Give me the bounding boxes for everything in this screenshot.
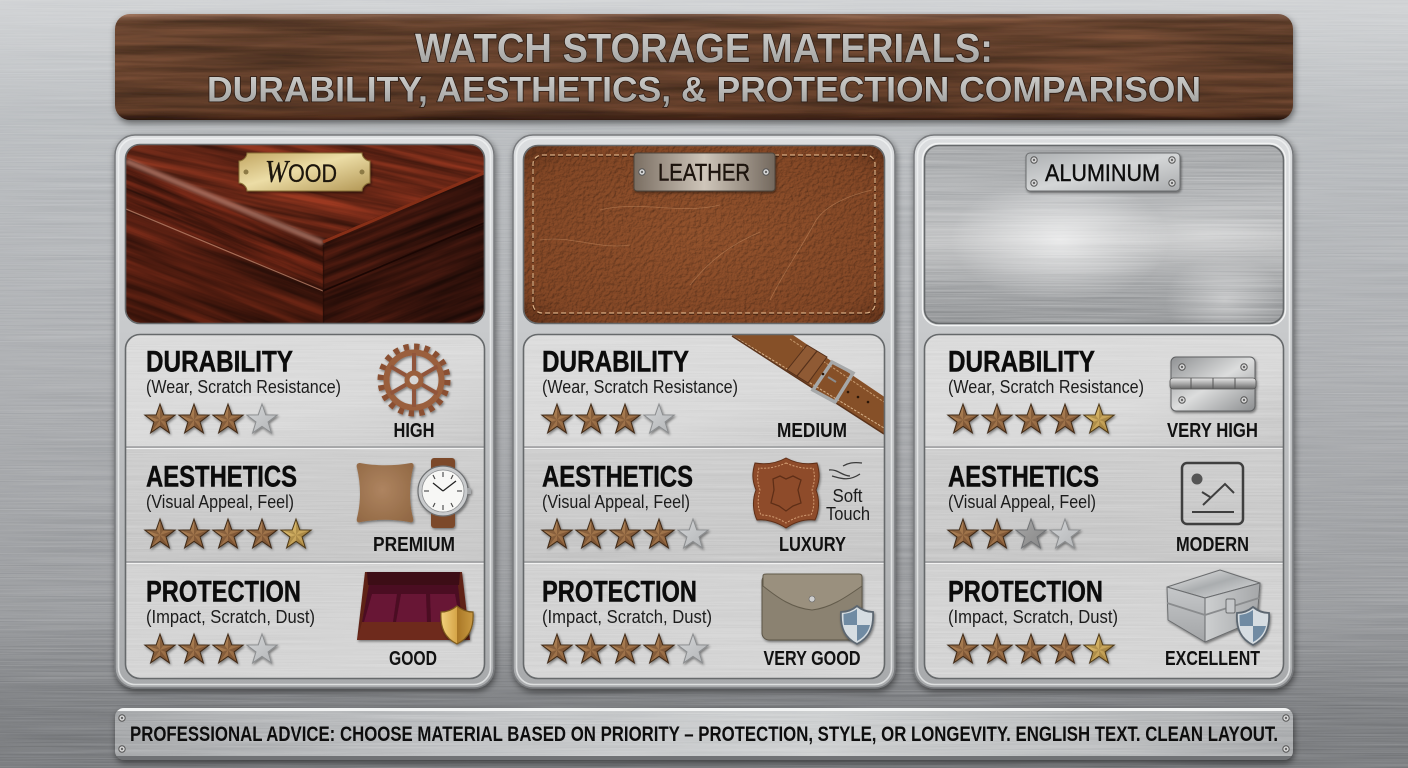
aluminum durability text: (Wear, Scratch Resistance) (948, 377, 1144, 397)
icon: velvet wooden box (357, 572, 470, 640)
icon: copper gear (382, 348, 446, 412)
icon: fabric pouch (762, 574, 862, 640)
wood durability stars: 3 of 4 (145, 404, 277, 433)
leather protection text: (Impact, Scratch, Dust) (542, 607, 712, 627)
leather protection text (542, 576, 712, 627)
aluminum material image (922, 142, 1286, 326)
wood aesthetics text: (Visual Appeal, Feel) (146, 492, 294, 512)
icon: aluminum case (1167, 570, 1260, 642)
leather aesthetics text (542, 460, 693, 512)
aluminum protection stars: 5 (948, 634, 1114, 663)
aluminum aesthetics stars: 2 of 4 (948, 519, 1080, 548)
aluminum aesthetics text (948, 460, 1099, 512)
leather durability text: (Wear, Scratch Resistance) (542, 377, 738, 397)
wood material image (124, 144, 486, 324)
wood protection text: PROTECTION (146, 576, 301, 608)
label: good: GOOD (389, 648, 437, 670)
label: premium: PREMIUM (373, 534, 455, 556)
aluminum aesthetics text: (Visual Appeal, Feel) (948, 492, 1096, 512)
aluminum rating rows (924, 334, 1284, 678)
label: luxury: LUXURY (779, 534, 847, 556)
icon: steel hinge (1170, 357, 1256, 411)
leather nameplate (634, 153, 775, 191)
leather material image (524, 146, 884, 324)
label: very good: VERY GOOD (764, 648, 860, 670)
leather aesthetics text: (Visual Appeal, Feel) (542, 492, 690, 512)
title text: WATCH STORAGE MATERIALS: (415, 25, 993, 71)
aluminum durability text: DURABILITY (948, 346, 1095, 378)
aluminum durability text (948, 346, 1144, 397)
aluminum protection text: (Impact, Scratch, Dust) (948, 607, 1118, 627)
icon: leather watch strap with buckle (732, 335, 886, 435)
wood nameplate: WOOD (265, 153, 337, 189)
aluminum aesthetics text: AESTHETICS (948, 460, 1099, 494)
icon: steel shield (1237, 607, 1269, 645)
leather rating rows (524, 334, 886, 678)
panel: leather (513, 135, 895, 688)
leather durability stars: 3 of 4 (542, 404, 674, 433)
wood protection text: (Impact, Scratch, Dust) (146, 607, 315, 627)
leather protection stars: 4 of 5 (542, 634, 708, 663)
aluminum nameplate (1026, 153, 1180, 191)
aluminum protection text (948, 576, 1118, 627)
icon: watch pillow (357, 463, 414, 522)
title text: DURABILITY, AESTHETICS, & PROTECTION COMPARISON (207, 70, 1201, 110)
wood protection text (146, 576, 315, 627)
panel: aluminum (914, 135, 1295, 688)
wood protection stars: 3 of 4 (145, 634, 277, 663)
label: very high: VERY HIGH (1167, 420, 1258, 442)
wood nameplate (239, 153, 370, 191)
icon: wristwatch (418, 458, 471, 528)
icon: modern picture frame (1182, 463, 1243, 524)
icon: leather patch (753, 458, 819, 528)
icon: gold shield (441, 606, 473, 644)
wood durability text: DURABILITY (146, 346, 293, 378)
soft touch caption: Touch (826, 504, 870, 524)
aluminum durability stars: 5 (948, 404, 1114, 433)
aluminum protection text: PROTECTION (948, 576, 1103, 608)
title plaque (115, 14, 1293, 120)
wood rating rows (126, 334, 484, 678)
soft touch caption: Soft (832, 486, 862, 506)
leather durability text (542, 346, 738, 397)
label: medium: MEDIUM (777, 420, 847, 442)
label: high: HIGH (394, 420, 434, 442)
wood aesthetics stars: 5 (145, 519, 311, 548)
leather protection text: PROTECTION (542, 576, 697, 608)
leather nameplate: LEATHER (658, 160, 750, 186)
panel: wood (110, 133, 500, 696)
label: excellent: EXCELLENT (1165, 648, 1260, 670)
soft touch caption (826, 486, 870, 524)
icon: steel shield (841, 606, 873, 644)
footer plate (115, 708, 1293, 760)
label: modern: MODERN (1176, 534, 1249, 556)
leather durability text: DURABILITY (542, 346, 689, 378)
wood aesthetics text (146, 460, 297, 512)
icon: soft touch waves (829, 463, 862, 479)
leather aesthetics text: AESTHETICS (542, 460, 693, 494)
leather aesthetics stars: 4 of 5 (542, 519, 708, 548)
wood durability text (146, 346, 341, 397)
wood durability text: (Wear, Scratch Resistance) (146, 377, 341, 397)
wood aesthetics text: AESTHETICS (146, 460, 297, 494)
aluminum nameplate: ALUMINUM (1045, 160, 1160, 187)
title text (207, 25, 1201, 110)
